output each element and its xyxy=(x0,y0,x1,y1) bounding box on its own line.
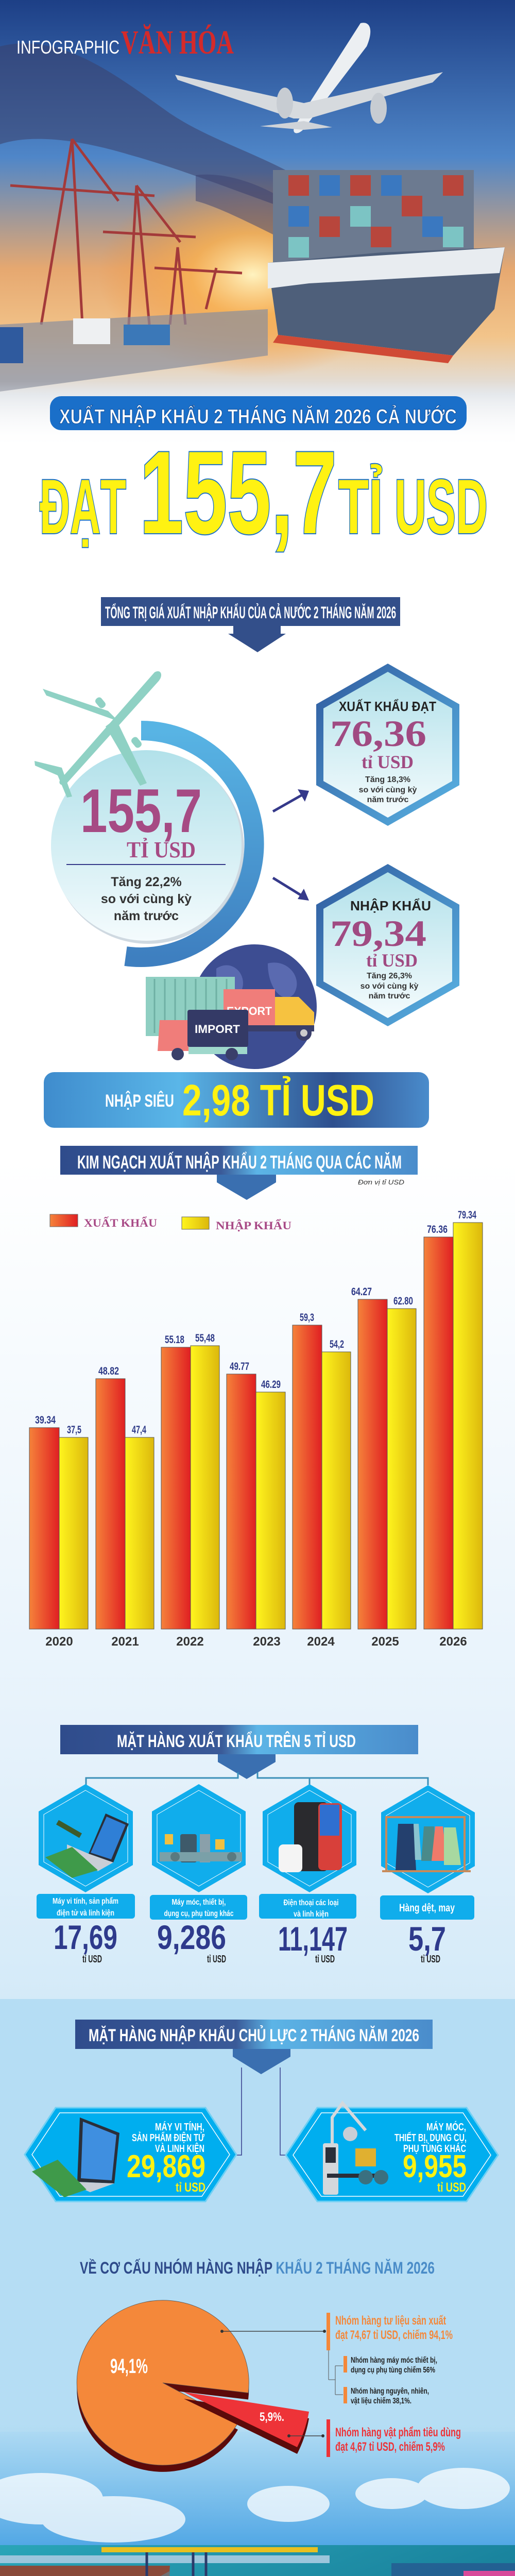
hexagon: import 79,34: năm trước xyxy=(369,992,410,1001)
export item 2: machinery: dụng cụ, phụ tùng khác xyxy=(164,1909,234,1918)
import item 1: computers 29,869 xyxy=(25,2108,236,2201)
bar values: 46.29 xyxy=(261,1379,281,1391)
import item 2: machinery 9,955: MÁY MÓC, xyxy=(426,2121,466,2133)
year labels: 2026 xyxy=(439,1635,467,1649)
bar values: 76.36 xyxy=(427,1224,448,1235)
pie chart: 94,1% / 5,9%: 94,1% xyxy=(110,2355,148,2378)
total circle: 155,7 tỉ USD xyxy=(51,750,244,944)
import item 2: machinery 9,955 xyxy=(286,2103,498,2201)
legend: XUẤT KHẨU xyxy=(84,1216,157,1229)
import item 1: computers 29,869: VÀ LINH KIỆN xyxy=(155,2142,204,2155)
export item 4: textiles: tỉ USD xyxy=(421,1954,440,1965)
import item 2: machinery 9,955: tỉ USD xyxy=(437,2180,466,2195)
pie chart: 94,1% / 5,9%: 5,9%. xyxy=(260,2410,284,2424)
export item 3: phones: 11,147 xyxy=(278,1920,348,1958)
export item 1: computers: tỉ USD xyxy=(82,1954,102,1965)
arrow: to import xyxy=(273,878,309,901)
export item 4: textiles xyxy=(380,1785,475,1965)
ring arc xyxy=(126,731,254,957)
bar values: 79.34 xyxy=(458,1209,476,1221)
export item 2: machinery: tỉ USD xyxy=(207,1954,226,1965)
callout: consumer goods 5,9% xyxy=(287,2419,461,2457)
export item 3: phones: Điện thoại các loại xyxy=(283,1899,339,1907)
hexagon: export 76,36: 76,36 xyxy=(330,713,426,754)
import item 1: computers 29,869: 29,869 xyxy=(127,2149,205,2184)
hexagon: import 79,34: 79,34 xyxy=(330,913,426,954)
bar values: 49.77 xyxy=(230,1361,249,1372)
export item 2: machinery: 9,286 xyxy=(157,1918,226,1956)
year labels: 2024 xyxy=(307,1635,335,1649)
section heading: export items > 5 bn xyxy=(60,1725,418,1779)
callout: sub-groups: dụng cụ phụ tùng chiếm 56% xyxy=(351,2366,435,2375)
hexagon: export 76,36: Tăng 18,3% xyxy=(365,775,410,784)
big headline: ĐẠT 155,7 TỈ USD: TỈ xyxy=(338,463,383,550)
import item 2: machinery 9,955: 9,955 xyxy=(403,2149,467,2184)
arrow: to export xyxy=(273,789,309,811)
icon: airplane (pastel) xyxy=(35,671,161,798)
hexagon: import 79,34: tỉ USD xyxy=(366,950,418,971)
header photo: port, ship and plane xyxy=(0,0,515,448)
section heading: main imports xyxy=(75,2020,433,2074)
big headline: ĐẠT 155,7 TỈ USD xyxy=(40,427,488,558)
big headline: ĐẠT 155,7 TỈ USD: 155,7 xyxy=(140,427,337,558)
import item 2: machinery 9,955: THIẾT BỊ, DỤNG CỤ, xyxy=(394,2132,467,2144)
hexagon: export 76,36: tỉ USD xyxy=(362,752,414,772)
year labels: 2022 xyxy=(176,1635,204,1649)
bar values: 55.18 xyxy=(165,1334,184,1346)
callout: sub-groups: vật liệu chiếm 38,1%. xyxy=(351,2397,411,2405)
callout: consumer goods 5,9%: đạt 4,67 tỉ USD, chiếm 5,9% xyxy=(335,2440,445,2454)
hexagon: export 76,36 xyxy=(316,664,459,826)
callout: production goods 94,1%: đạt 74,67 tỉ USD, chiếm 94,1% xyxy=(335,2328,453,2342)
import item 2: machinery 9,955: PHỤ TÙNG KHÁC xyxy=(403,2142,466,2155)
callout: sub-groups xyxy=(329,2350,437,2405)
hexagon: import 79,34 xyxy=(316,864,459,1026)
bar values: 54,2 xyxy=(330,1338,344,1350)
total circle: 155,7 tỉ USD: 155,7 xyxy=(80,776,202,845)
export item 3: phones xyxy=(259,1784,356,1965)
bar values: 48.82 xyxy=(98,1365,119,1377)
bar values: 37,5 xyxy=(67,1424,81,1436)
hexagon: export 76,36: năm trước xyxy=(367,795,408,804)
hexagon: export 76,36: XUẤT KHẨU ĐẠT xyxy=(339,699,436,714)
hexagon: import 79,34: Tăng 26,3% xyxy=(367,972,412,980)
bar values: 55,48 xyxy=(195,1332,215,1344)
logo: INFOGRAPHIC VĂN HÓA (top) xyxy=(16,24,234,61)
bar values: 64.27 xyxy=(351,1286,372,1298)
total circle: 155,7 tỉ USD: năm trước xyxy=(114,909,179,923)
export item 2: machinery xyxy=(150,1784,247,1965)
callout: consumer goods 5,9%: Nhóm hàng vật phẩm tiêu dùng xyxy=(335,2426,461,2439)
callout: production goods 94,1%: Nhóm hàng tư liệu sản xuất xyxy=(335,2314,446,2328)
bar values: 59,3 xyxy=(300,1312,314,1324)
trade deficit banner: nhập siêu 2,98 tỉ USD xyxy=(44,1072,429,1128)
hexagon: import 79,34: so với cùng kỳ xyxy=(360,982,418,991)
total circle: 155,7 tỉ USD: TỈ USD xyxy=(127,837,196,862)
lower background: sky with clouds xyxy=(0,2416,515,2555)
illustration: globe and trucks xyxy=(146,944,317,1069)
year labels: 2021 xyxy=(111,1635,139,1649)
background: middle sections xyxy=(0,443,515,1164)
export item 1: computers: Máy vi tính, sản phẩm xyxy=(53,1896,118,1906)
year labels: 2020 xyxy=(45,1635,73,1649)
bar values xyxy=(35,1209,476,1436)
import item 1: computers 29,869: SẢN PHẨM ĐIỆN TỬ xyxy=(132,2131,204,2144)
export item 3: phones: và linh kiện xyxy=(294,1910,329,1919)
title pill xyxy=(50,396,467,430)
bar values: 62.80 xyxy=(393,1295,413,1307)
export item 2: machinery: Máy móc, thiết bị, xyxy=(172,1898,226,1907)
bar values: 39.34 xyxy=(35,1414,56,1426)
export item 4: textiles: 5,7 xyxy=(408,1920,446,1958)
pie chart: 94,1% / 5,9% xyxy=(77,2300,309,2472)
export item 1: computers: 17,69 xyxy=(54,1918,117,1956)
export item 1: computers xyxy=(37,1784,135,1965)
import item 1: computers 29,869: tỉ USD xyxy=(176,2180,205,2195)
callout: sub-groups: Nhóm hàng nguyên, nhiên, xyxy=(351,2387,429,2396)
year labels xyxy=(45,1635,467,1649)
logo: INFOGRAPHIC VĂN HÓA (top): VĂN HÓA xyxy=(121,24,234,61)
truck: export xyxy=(224,989,314,1041)
logo: INFOGRAPHIC VĂN HÓA (top): INFOGRAPHIC xyxy=(16,37,119,58)
trade deficit banner: nhập siêu 2,98 tỉ USD: 2,98 TỈ USD xyxy=(182,1076,374,1125)
bar values: 47,4 xyxy=(132,1424,146,1436)
bar chart: 2020-2026 xyxy=(29,1209,483,1649)
export item 4: textiles: Hàng dệt, may xyxy=(399,1902,455,1914)
callout: production goods 94,1% xyxy=(220,2313,453,2350)
hexagon: import 79,34: NHẬP KHẨU xyxy=(350,898,431,913)
truck: export: EXPORT xyxy=(227,1005,272,1018)
section heading: export items > 5 bn: MẶT HÀNG XUẤT KHẨU TRÊN 5 TỈ USD xyxy=(117,1732,356,1751)
footer photo: container port xyxy=(0,2545,515,2576)
total circle: 155,7 tỉ USD: so với cùng kỳ xyxy=(101,892,192,906)
big headline: ĐẠT 155,7 TỈ USD: ĐẠT xyxy=(40,463,126,550)
import item 1: computers 29,869: MÁY VI TÍNH, xyxy=(155,2121,204,2133)
total circle: 155,7 tỉ USD: Tăng 22,2% xyxy=(111,875,182,889)
section heading: tổng trị giá xyxy=(101,597,400,652)
year labels: 2023 xyxy=(253,1635,281,1649)
hexagon: export 76,36: so với cùng kỳ xyxy=(359,786,417,794)
year labels: 2025 xyxy=(371,1635,399,1649)
truck: import xyxy=(158,1010,248,1060)
trade deficit banner: nhập siêu 2,98 tỉ USD: NHẬP SIÊU xyxy=(105,1091,174,1111)
export item 3: phones: tỉ USD xyxy=(315,1954,335,1965)
pie section heading: VỀ CƠ CẤU NHÓM HÀNG NHẬP KHẨU 2 THÁNG NĂM 2026 xyxy=(80,2259,435,2277)
section heading: kim ngạch xyxy=(60,1146,418,1200)
legend xyxy=(50,1214,291,1232)
callout: sub-groups: Nhóm hàng máy móc thiết bị, xyxy=(351,2356,437,2365)
export item 1: computers: điện tử và linh kiện xyxy=(57,1909,114,1918)
truck: import: IMPORT xyxy=(195,1023,241,1036)
legend: NHẬP KHẨU xyxy=(216,1219,291,1232)
unit note: Đơn vị tỉ USD xyxy=(358,1178,404,1186)
